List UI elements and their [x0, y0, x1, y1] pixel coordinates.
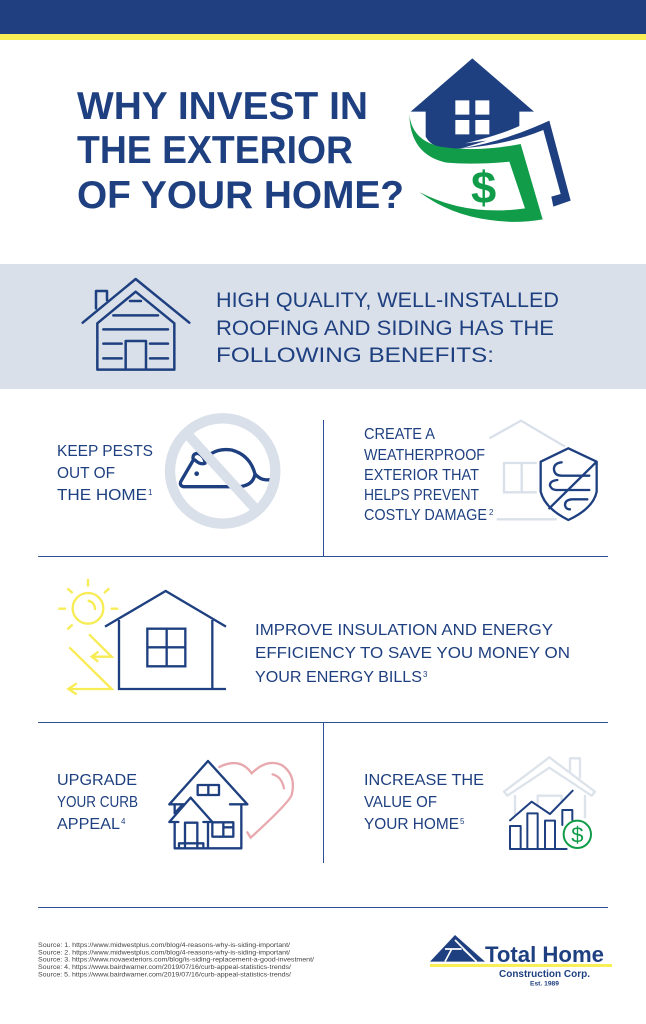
source list [38, 942, 314, 978]
icon: weatherproof shield over house [489, 421, 597, 520]
title: THE EXTERIOR [77, 129, 353, 172]
top banner [0, 0, 646, 40]
text: curb appeal [57, 772, 138, 833]
text: curb appeal: 4 [121, 817, 126, 826]
text: keep pests out: THE HOME [57, 487, 147, 504]
text: insulation and energy efficiency: EFFICIENCY TO SAVE YOU MONEY ON [255, 645, 570, 662]
benefits heading: HIGH QUALITY, WELL-INSTALLED [216, 288, 559, 312]
logo roof mark [430, 935, 485, 962]
icon: house and money logo [409, 58, 571, 222]
text: keep pests out: 1 [148, 488, 153, 497]
source list: Source: 5. https://www.bairdwarner.com/2019/07/16/curb-appeal-statistics-trends/ [38, 972, 291, 978]
title [77, 85, 404, 217]
company logo [430, 935, 612, 988]
text: insulation and energy efficiency: 3 [423, 670, 428, 679]
text: insulation and energy efficiency: IMPROVE INSULATION AND ENERGY [255, 622, 553, 639]
benefits heading: FOLLOWING BENEFITS: [216, 343, 494, 367]
text: increase home value [364, 772, 484, 833]
text: curb appeal: APPEAL [57, 816, 120, 833]
company logo: Total Home [485, 942, 604, 967]
icon: sun reflecting off house [58, 579, 226, 694]
text: increase home value: INCREASE THE [364, 772, 484, 789]
text: increase home value: YOUR HOME [364, 816, 459, 833]
company logo: Construction Corp. [499, 968, 590, 980]
text: increase home value: VALUE OF [364, 794, 437, 811]
text: curb appeal: UPGRADE [57, 772, 137, 789]
text: weatherproof exterior: HELPS PREVENT [364, 487, 479, 504]
text: weatherproof exterior: EXTERIOR THAT [364, 467, 479, 484]
text: curb appeal: YOUR CURB [57, 794, 138, 811]
text: keep pests out: KEEP PESTS [57, 443, 153, 460]
text: weatherproof exterior: CREATE A [364, 426, 435, 443]
source list: Source: 3. https://www.novaexteriors.com/blog/is-siding-replacement-a-good-investment/ [38, 956, 314, 964]
icon: house with heart [169, 761, 293, 848]
text: weatherproof exterior: WEATHERPROOF [364, 447, 485, 464]
text: weatherproof exterior [364, 426, 494, 524]
text: keep pests out: OUT OF [57, 465, 115, 482]
icon: house and money logo: $ [471, 162, 496, 213]
benefits heading [216, 288, 559, 367]
text: insulation and energy efficiency [255, 622, 570, 686]
text: keep pests out [57, 443, 153, 504]
text: weatherproof exterior: 2 [489, 508, 494, 517]
icon: house with siding [83, 279, 189, 370]
source list: Source: 4. https://www.bairdwarner.com/2019/07/16/curb-appeal-statistics-trends/ [38, 964, 291, 971]
source list: Source: 1. https://www.midwestplus.com/blog/4-reasons-why-is-siding-important/ [38, 942, 290, 949]
title: WHY INVEST IN [77, 85, 368, 128]
company logo: Est. 1989 [530, 982, 560, 988]
text: weatherproof exterior: COSTLY DAMAGE [364, 507, 487, 524]
text: increase home value: 5 [460, 817, 465, 826]
text: insulation and energy efficiency: YOUR ENERGY BILLS [255, 669, 422, 686]
icon: house value chart with dollar coin [504, 757, 595, 849]
source list: Source: 2. https://www.midwestplus.com/blog/4-reasons-why-is-siding-important/ [38, 950, 290, 956]
icon: mouse with prohibition sign [170, 418, 275, 524]
panel: benefits intro band [0, 264, 646, 389]
icon: house value chart with dollar coin: $ [571, 822, 583, 847]
benefits heading: ROOFING AND SIDING HAS THE [216, 316, 554, 340]
title: OF YOUR HOME? [77, 174, 404, 217]
